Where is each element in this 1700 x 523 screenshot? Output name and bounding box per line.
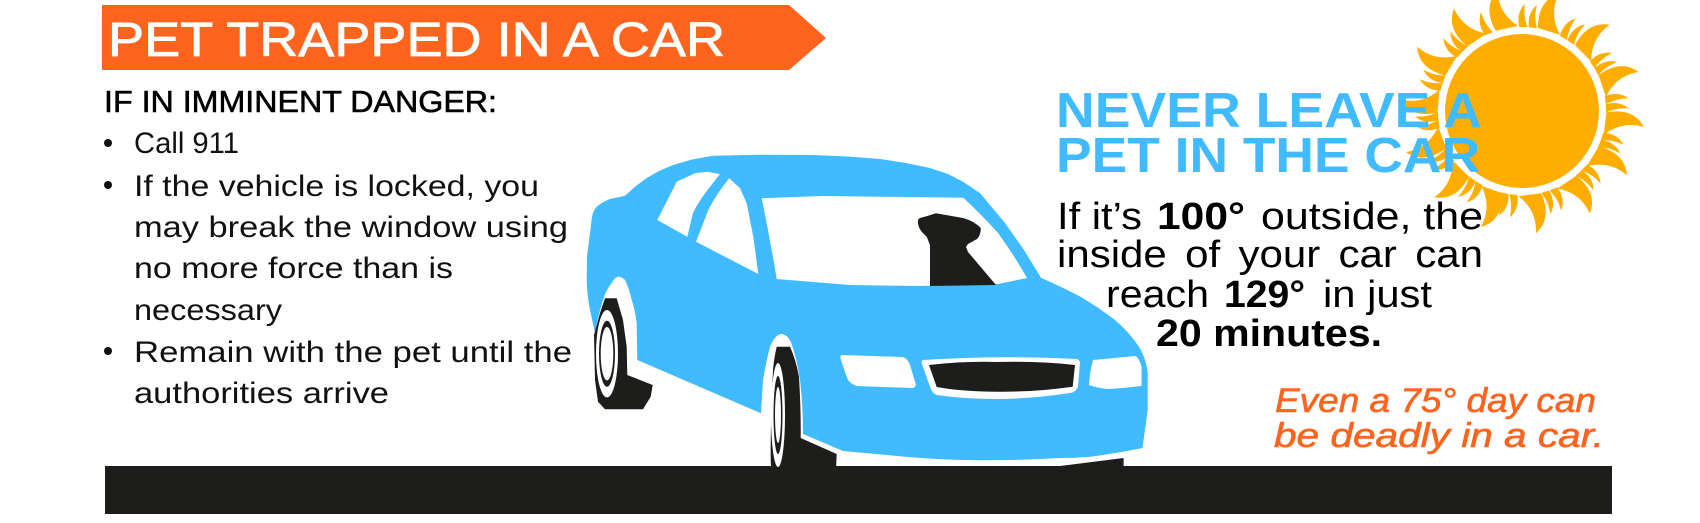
text block: temperature fact: in just <box>1323 274 1432 316</box>
icon: sun <box>1398 0 1645 235</box>
text block: temperature fact: 20 minutes. <box>1156 313 1382 355</box>
dog silhouette <box>918 213 996 286</box>
rear window <box>657 172 720 237</box>
heading: never leave a pet in the car: NEVER LEAVE A <box>1056 84 1482 138</box>
heading: never leave a pet in the car: PET IN THE CAR <box>1056 129 1480 183</box>
rear door window <box>696 178 758 274</box>
grille <box>922 357 1080 399</box>
rear wheel <box>594 298 653 409</box>
bullet list: If the vehicle is locked, you <box>134 170 539 203</box>
left headlight <box>840 355 916 388</box>
callout: even a 75 degree day: Even a 75° day can <box>1275 382 1596 420</box>
bullet list: necessary <box>134 294 282 327</box>
bullet list: Remain with the pet until the <box>134 336 572 369</box>
illustration: blue car with dog <box>587 155 1148 470</box>
text block: temperature fact: If it’s <box>1057 196 1142 238</box>
car body <box>587 155 1148 460</box>
bullet list: authorities arrive <box>134 377 389 410</box>
banner: pet trapped in a car <box>102 5 826 70</box>
text block: temperature fact: outside, the <box>1261 196 1483 238</box>
far wheel <box>1060 458 1124 467</box>
subheading: if in imminent danger: IF IN IMMINENT DANGER: <box>104 84 497 119</box>
bullet list: no more force than is <box>134 252 453 285</box>
windshield <box>762 196 1027 286</box>
right headlight <box>1089 356 1142 389</box>
text block: temperature fact <box>1057 196 1483 355</box>
bullet list: Call 911 <box>134 127 239 160</box>
callout: even a 75 degree day: be deadly in a car. <box>1274 417 1604 455</box>
front wheel <box>771 347 837 470</box>
text block: temperature fact: inside of your car can <box>1057 234 1483 276</box>
ground bar <box>105 466 1612 514</box>
text block: temperature fact: reach <box>1106 274 1209 316</box>
banner: pet trapped in a car: PET TRAPPED IN A CAR <box>108 14 725 67</box>
callout: even a 75 degree day <box>1274 382 1604 455</box>
text block: temperature fact: 100° <box>1157 196 1245 238</box>
bullet list: may break the window using <box>134 211 568 244</box>
heading: never leave a pet in the car <box>1056 84 1482 183</box>
bullet list <box>104 127 572 410</box>
text block: temperature fact: 129° <box>1224 274 1305 316</box>
